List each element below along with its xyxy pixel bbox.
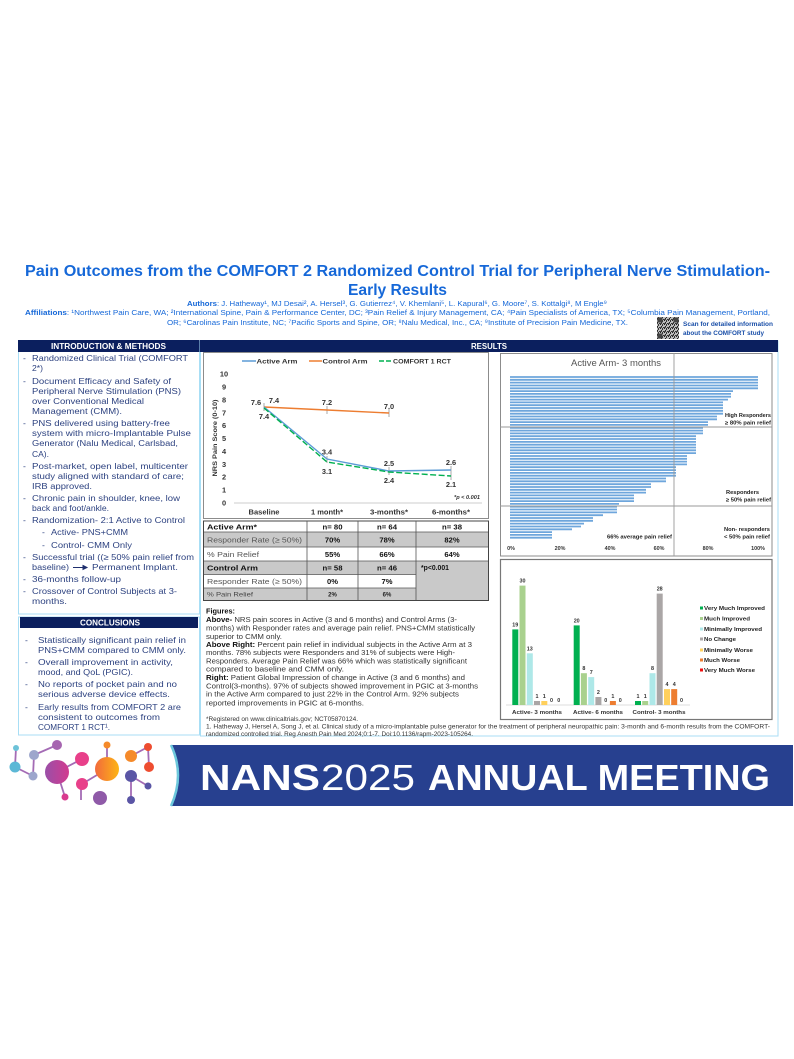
banner: NANS 2025 annual meeting bbox=[10, 740, 793, 806]
text block: figure captions: superior to CMM only. bbox=[206, 632, 282, 641]
text block: figure captions: Responders. Average Pain Relief was 66% which was statistically significant bbox=[206, 656, 467, 666]
data labels: 7 bbox=[590, 670, 593, 676]
text block: figure captions: Above- NRS pain scores in Active (3 and 6 months) and Control Arms (3- bbox=[206, 615, 458, 624]
y axis: 3 bbox=[222, 460, 226, 469]
table: responder rates: 66% bbox=[379, 550, 395, 559]
table: responder rates: 0% bbox=[327, 577, 338, 586]
y axis: 2 bbox=[222, 472, 226, 482]
x axis labels: 60% bbox=[654, 546, 665, 552]
data labels: 1 bbox=[611, 694, 614, 700]
x axis labels: 20% bbox=[555, 546, 566, 552]
x axis labels: 1 month* bbox=[311, 508, 343, 516]
y axis: 7 bbox=[222, 408, 226, 418]
data labels: *p < 0.001 bbox=[454, 495, 480, 501]
affiliations: Affiliations : ¹Northwest Pain Care, WA; ²International Spine, Pain & Performance Center, DC; ³Pain Relief & Injury Management, CA; ⁴Pain Specialists of America, TX; ⁵Columbia Pain Management, Portland, bbox=[25, 308, 770, 317]
table: responder rates: 70% bbox=[325, 536, 340, 544]
text block: figure captions: compared to baseline and CMM only. bbox=[206, 664, 344, 674]
text block: figure captions: in the Active Arm compared to just 22% in the Control Arm. 92% subjects bbox=[206, 690, 459, 698]
table: responder rates: Active Arm* bbox=[207, 522, 257, 532]
x axis labels bbox=[248, 508, 470, 516]
text block: conclusions bullets: No reports of pocket pain and no bbox=[38, 679, 177, 689]
table: responder rates: Responder Rate (≥ 50%) bbox=[207, 577, 302, 586]
chart title: Active Arm- 3 months bbox=[571, 358, 661, 369]
legend: PGIC categories: Much Worse bbox=[704, 658, 740, 664]
text block: methods bullets: over Conventional Medical bbox=[32, 396, 144, 406]
panel: results bbox=[200, 340, 778, 738]
series: control arm bbox=[264, 407, 389, 413]
legend: PGIC categories bbox=[700, 606, 765, 674]
banner text bbox=[200, 757, 770, 798]
title: Pain Outcomes from the COMFORT 2 Randomized Control Trial for Peripheral Nerve Stimulation- bbox=[25, 263, 770, 280]
legend: PGIC categories: Very Much Worse bbox=[704, 668, 755, 674]
legend: PGIC categories: No Change bbox=[704, 637, 736, 643]
table: responder rates bbox=[204, 521, 488, 600]
data labels: 1 bbox=[644, 694, 647, 700]
text block: methods bullets: - bbox=[23, 376, 26, 386]
data labels: 7.0 bbox=[384, 402, 394, 411]
bars: active 6 months bbox=[574, 625, 616, 705]
data labels: 1 bbox=[636, 694, 640, 700]
data labels: 3.1 bbox=[322, 467, 332, 476]
text block: methods bullets: - bbox=[23, 552, 26, 562]
QR code bbox=[657, 317, 679, 339]
data labels: 19 bbox=[512, 622, 518, 628]
annotation: average pain relief: 66% average pain relief bbox=[607, 534, 672, 540]
x axis labels: 3-months* bbox=[370, 508, 408, 516]
legend: line chart: Active Arm bbox=[256, 360, 298, 366]
text block: conclusions bullets: mood, and QoL (PGIC). bbox=[38, 667, 133, 677]
y axis: NRS Pain Score (0-10) bbox=[213, 400, 219, 476]
panel: introduction and methods bbox=[18, 340, 200, 614]
series: COMFORT 1 RCT bbox=[264, 408, 451, 476]
annotation: high responders: ≥ 80% pain relief bbox=[725, 420, 771, 426]
table: responder rates: n= 46 bbox=[377, 564, 397, 572]
banner text: 2025 bbox=[321, 757, 415, 798]
legend: line chart: COMFORT 1 RCT bbox=[393, 360, 451, 366]
legend: PGIC categories: Much Improved bbox=[704, 616, 750, 622]
data labels bbox=[251, 396, 480, 501]
table: responder rates: % Pain Relief bbox=[207, 592, 253, 598]
text block: conclusions bullets: Early results from COMFORT 2 are bbox=[38, 702, 181, 712]
error bars bbox=[264, 403, 451, 480]
annotation: non-responders: Non- responders bbox=[724, 527, 770, 533]
text block: methods bullets: Management (CMM). bbox=[32, 406, 122, 416]
text block: methods bullets: CA). bbox=[32, 449, 49, 459]
text block: methods bullets: Chronic pain in shoulder, knee, low bbox=[32, 493, 181, 503]
footnotes: 1. Hatheway J, Hersel A, Song J, et al. Clinical study of a micro-implantable pulse generator for the treatment of peripheral neuropathic pain: 3-month and 6-month results from the COMFORT- bbox=[206, 724, 770, 730]
text block: methods bullets: - bbox=[23, 461, 26, 471]
text block: conclusions bullets: - bbox=[25, 657, 28, 667]
text block: methods bullets: - bbox=[23, 515, 26, 525]
text block: methods bullets: Document Efficacy and Safety of bbox=[32, 376, 172, 386]
table: responder rates: 2% bbox=[328, 592, 338, 598]
text block: figure captions: Figures: bbox=[206, 606, 235, 616]
y axis: 1 bbox=[222, 486, 226, 494]
legend: line chart bbox=[242, 360, 451, 366]
QR caption: about the COMFORT study bbox=[683, 330, 764, 337]
text block: methods bullets: back and foot/ankle. bbox=[32, 503, 109, 513]
text block: methods bullets: Active- PNS+CMM bbox=[51, 527, 128, 537]
data labels: 0 bbox=[604, 698, 607, 704]
text block: conclusions bullets: Overall improvement in activity, bbox=[38, 657, 173, 667]
data labels: 8 bbox=[582, 666, 585, 672]
text block: conclusions bullets: consistent to outcomes from bbox=[38, 712, 160, 722]
table: responder rates: 82% bbox=[444, 536, 460, 544]
x axis labels: Baseline bbox=[248, 508, 280, 516]
text block: methods bullets: Control- CMM Only bbox=[51, 540, 133, 550]
x axis labels: 0% bbox=[507, 546, 515, 552]
QR caption bbox=[683, 321, 773, 337]
affiliations: OR; ⁶Carolinas Pain Institute, NC; ⁷Pacific Sports and Spine, OR; ⁸Nalu Medical, Inc., CA; ⁹Institute of Precision Pain Medicine, TX. bbox=[167, 318, 628, 327]
text block: conclusions bullets: Statistically significant pain relief in bbox=[38, 635, 186, 645]
table: responder rates: 64% bbox=[444, 550, 460, 559]
data labels: 7.4 bbox=[259, 412, 270, 421]
table: responder rates: Responder Rate (≥ 50%) bbox=[207, 536, 302, 544]
footnotes: *Registered on www.clinicaltrials.gov; NCT05870124. bbox=[206, 717, 358, 723]
annotation: high responders bbox=[725, 413, 771, 426]
series: active arm bbox=[264, 407, 451, 471]
y axis: 4 bbox=[222, 447, 227, 456]
text block: methods bullets: Post-market, open label, multicenter bbox=[32, 461, 188, 471]
text block: figure captions: months) with Responder rates and average pain relief. PNS+CMM statistically bbox=[206, 624, 475, 632]
table: responder rates: *p<0.001 bbox=[421, 563, 450, 572]
data labels: 2.1 bbox=[446, 480, 456, 489]
text block: conclusions bullets: COMFORT 1 RCT¹. bbox=[38, 722, 110, 732]
footnotes: randomized controlled trial. Reg Anesth Pain Med 2024;0:1-7. Doi:10.1136/rapm-2023-105264. bbox=[206, 732, 473, 738]
text block: methods bullets: - bbox=[23, 353, 26, 363]
text block: methods bullets: - bbox=[23, 418, 26, 428]
table: responder rates: % Pain Relief bbox=[207, 550, 260, 559]
data labels: 28 bbox=[657, 587, 663, 593]
table: responder rates: n= 58 bbox=[322, 564, 342, 572]
annotation: non-responders bbox=[724, 527, 770, 540]
legend: line chart: Control Arm bbox=[322, 360, 368, 366]
y axis bbox=[213, 370, 228, 508]
heading: results: RESULTS bbox=[471, 342, 508, 351]
data labels: 20 bbox=[574, 618, 580, 624]
title bbox=[25, 263, 770, 299]
heading: introduction and methods: INTRODUCTION & METHODS bbox=[51, 342, 167, 351]
y axis: 6 bbox=[222, 421, 226, 430]
data labels: 1 bbox=[543, 694, 546, 700]
data labels: 7.4 bbox=[269, 396, 280, 405]
banner text: ANNUAL MEETING bbox=[428, 757, 770, 798]
data labels: 7.6 bbox=[251, 398, 261, 407]
title: Early Results bbox=[348, 282, 447, 299]
data labels: 30 bbox=[520, 579, 526, 585]
text block: methods bullets: - bbox=[23, 574, 26, 584]
heading: conclusions: CONCLUSIONS bbox=[80, 618, 141, 628]
text block: figure captions: Control(3-months). 97% of subjects showed improvement in PGIC at 3-months bbox=[206, 682, 478, 690]
data labels: 3.4 bbox=[322, 448, 333, 456]
table: responder rates: n= 80 bbox=[322, 522, 342, 532]
data labels: 2.4 bbox=[384, 476, 395, 485]
text block: methods bullets: - bbox=[42, 527, 45, 537]
text block: conclusions bullets: - bbox=[25, 679, 28, 689]
icon: molecule network bbox=[10, 740, 154, 805]
text block: figure captions: Above Right: Percent pain relief in individual subjects in the Active Arm at 3 bbox=[206, 640, 472, 649]
threshold lines bbox=[500, 353, 772, 556]
y axis: 9 bbox=[222, 382, 226, 392]
text block: methods bullets: study aligned with standard of care; bbox=[32, 471, 184, 481]
table: responder rates: Control Arm bbox=[207, 564, 258, 572]
annotation: high responders: High Responders bbox=[725, 413, 771, 419]
table: responder rates: 55% bbox=[325, 550, 340, 559]
y axis: 8 bbox=[222, 396, 226, 404]
text block: methods bullets: - bbox=[23, 493, 26, 503]
panel: conclusions bbox=[18, 617, 200, 735]
footnotes bbox=[206, 717, 770, 738]
QR caption: Scan for detailed information bbox=[683, 321, 773, 328]
annotation: responders: ≥ 50% pain relief bbox=[726, 498, 771, 504]
text block: methods bullets: Randomized Clinical Trial (COMFORT bbox=[32, 353, 189, 363]
x axis labels: Active- 3 months bbox=[512, 710, 562, 716]
authors: Authors: J. Hatheway¹, MJ Desai², A. Hersel³, G. Gutierrez⁴, V. Khemlani⁵, L. Kapural⁶, G. Moore⁷, S. Kottalgi⁸, M Engle⁹ bbox=[187, 299, 607, 308]
text block: figure captions: months. 78% subjects were Responders and 31% of subjects were High- bbox=[206, 648, 456, 657]
text block: methods bullets: 2*) bbox=[32, 363, 43, 373]
data labels: 2.6 bbox=[446, 458, 456, 467]
y axis: 0 bbox=[222, 498, 226, 508]
annotation: responders bbox=[726, 490, 771, 504]
text block: methods bullets bbox=[23, 353, 194, 606]
legend: PGIC categories: Minimally Worse bbox=[704, 648, 753, 654]
x axis labels: 100% bbox=[751, 546, 765, 552]
x axis labels: 80% bbox=[703, 546, 714, 552]
data labels bbox=[512, 579, 683, 704]
table: responder rates: 78% bbox=[379, 536, 395, 544]
text block: methods bullets: Peripheral Nerve Stimulation (PNS) bbox=[32, 386, 181, 396]
x axis labels: 40% bbox=[605, 546, 616, 552]
data labels: 2 bbox=[597, 690, 600, 696]
bar chart: individual pain relief bbox=[500, 353, 772, 556]
line chart: NRS pain score bbox=[204, 352, 488, 518]
x axis labels bbox=[512, 710, 686, 716]
text block: methods bullets: - bbox=[23, 586, 26, 596]
data labels: 0 bbox=[557, 698, 560, 704]
text block: figure captions bbox=[206, 606, 478, 708]
subject bars bbox=[510, 377, 758, 538]
x axis labels: 6-months* bbox=[432, 508, 470, 516]
text block: methods bullets: months. bbox=[32, 596, 67, 606]
text block: methods bullets: IRB approved. bbox=[32, 481, 92, 491]
bars: active 3 months bbox=[512, 586, 547, 705]
data labels: 8 bbox=[651, 666, 654, 672]
data labels: 0 bbox=[680, 698, 683, 704]
text block: methods bullets: system with micro-Implantable Pulse bbox=[32, 428, 191, 438]
table: responder rates: n= 38 bbox=[442, 522, 462, 532]
text block: conclusions bullets: - bbox=[25, 635, 28, 645]
text block: conclusions bullets bbox=[25, 635, 186, 732]
text block: methods bullets: Successful trial ((≥ 50% pain relief from bbox=[32, 552, 194, 562]
x axis labels bbox=[507, 546, 765, 552]
text block: methods bullets: PNS delivered using battery-free bbox=[32, 418, 170, 428]
text block: conclusions bullets: - bbox=[25, 702, 28, 712]
text block: methods bullets: - bbox=[42, 540, 45, 550]
y axis: 10 bbox=[220, 370, 228, 378]
data labels: 0 bbox=[550, 698, 553, 704]
legend: PGIC categories: Very Much Improved bbox=[704, 606, 765, 612]
text block: figure captions: reported improvements in PGIC at 6-months. bbox=[206, 698, 364, 708]
table: responder rates: 7% bbox=[382, 577, 393, 586]
text block: methods bullets: Randomization- 2:1 Active to Control bbox=[32, 515, 185, 525]
text block: methods bullets: Permanent Implant. bbox=[92, 562, 178, 572]
banner background bbox=[172, 745, 793, 806]
data labels: 0 bbox=[619, 698, 622, 704]
data labels: 2.5 bbox=[384, 459, 394, 468]
data labels: 4 bbox=[673, 682, 676, 688]
bar chart: patient global impression of change bbox=[500, 560, 772, 720]
table: responder rates: n= 64 bbox=[377, 522, 398, 532]
x axis labels: Active- 6 months bbox=[573, 710, 623, 716]
table: responder rates: 6% bbox=[383, 592, 392, 598]
text block: methods bullets: Crossover of Control Subjects at 3- bbox=[32, 586, 177, 596]
text block: methods bullets: Generator (Nalu Medical, Carlsbad, bbox=[32, 438, 178, 448]
legend: PGIC categories: Minimally Improved bbox=[704, 627, 762, 633]
data labels: 4 bbox=[666, 682, 668, 688]
text block: figure captions: Right: Patient Global Impression of change in Active (3 and 6 months) and bbox=[206, 673, 465, 682]
data labels: 13 bbox=[527, 646, 533, 652]
text block: conclusions bullets: PNS+CMM compared to CMM only. bbox=[38, 645, 186, 655]
bars: control 3 months bbox=[635, 594, 677, 705]
affiliations bbox=[25, 308, 770, 327]
x axis labels: Control- 3 months bbox=[632, 710, 686, 716]
annotation: non-responders: < 50% pain relief bbox=[724, 534, 770, 540]
banner text: NANS bbox=[200, 757, 320, 798]
data labels: 1 bbox=[536, 694, 538, 700]
annotation: responders: Responders bbox=[726, 490, 759, 496]
y axis: 5 bbox=[222, 434, 226, 443]
text block: methods bullets: baseline) bbox=[32, 562, 69, 572]
data labels: 7.2 bbox=[322, 398, 332, 407]
text block: conclusions bullets: serious adverse device effects. bbox=[38, 689, 170, 699]
text block: methods bullets: 36-months follow-up bbox=[32, 574, 121, 584]
